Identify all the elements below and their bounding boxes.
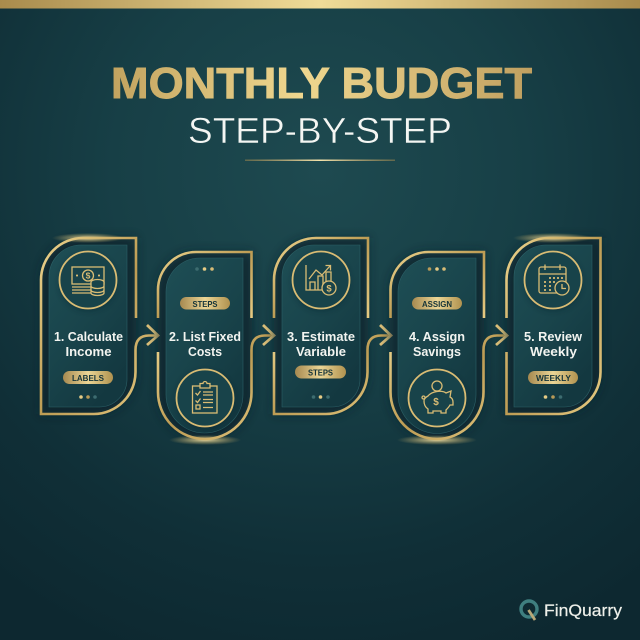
pill: weekly <box>528 371 578 384</box>
step 3 label: 3. Estimate <box>287 329 355 344</box>
panel: step 5 <box>506 233 601 414</box>
icon: banknote and coins: $ <box>86 270 91 280</box>
icon: bar chart with dollar <box>292 252 350 310</box>
page dots <box>195 267 214 271</box>
title divider <box>245 160 395 161</box>
step 5 label <box>524 329 583 359</box>
arrow: step 4 to step 5 <box>496 325 507 345</box>
arrow: step 1 to step 2 <box>147 325 158 345</box>
step 2 label: 2. List Fixed <box>169 329 241 344</box>
pill: labels <box>63 371 113 384</box>
pill: assign: ASSIGN <box>422 299 452 309</box>
step 3 label <box>287 329 355 359</box>
step 3 label: Variable <box>296 344 346 359</box>
panel: step 4 <box>390 252 507 445</box>
top gold bar <box>0 0 640 8</box>
arrow: step 2 to step 3 <box>263 325 274 345</box>
pill: steps: STEPS <box>192 299 218 309</box>
icon: calendar with clock <box>524 252 582 310</box>
logo: FinQuarry: FinQuarry <box>544 601 623 620</box>
panel: step 1 <box>41 233 158 414</box>
title <box>111 59 532 151</box>
step 1 label <box>54 329 123 359</box>
icon: clipboard checklist <box>176 370 234 428</box>
pill: weekly: WEEKLY <box>536 373 571 383</box>
pill: steps <box>180 297 230 310</box>
step 5 label: 5. Review <box>524 329 583 344</box>
icon: bar chart with dollar: $ <box>326 284 332 294</box>
icon: banknote and coins <box>60 252 116 310</box>
page dots <box>428 267 446 271</box>
arrow: step 3 to step 4 <box>380 325 391 345</box>
step 2 label: Costs <box>188 344 222 359</box>
step 4 label <box>409 329 465 359</box>
step 4 label: Savings <box>413 344 461 359</box>
step 5 label: Weekly <box>530 344 578 359</box>
step 4 label: 4. Assign <box>409 329 465 344</box>
page dots <box>544 395 562 399</box>
pill: labels: LABELS <box>72 373 104 383</box>
icon: piggy bank <box>408 370 466 428</box>
pill: assign <box>412 297 462 310</box>
pill: steps <box>295 366 346 378</box>
title: MONTHLY BUDGET <box>111 59 532 108</box>
page dots <box>79 395 97 399</box>
panel: step 3 <box>274 238 391 414</box>
page dots <box>312 395 330 399</box>
pill: steps: STEPS <box>308 368 333 378</box>
panel: step 2 <box>158 252 274 445</box>
step 2 label <box>169 329 241 359</box>
title: STEP-BY-STEP <box>188 110 452 151</box>
icon: piggy bank: $ <box>433 397 439 408</box>
step 1 label: Income <box>66 344 112 359</box>
step 1 label: 1. Calculate <box>54 329 123 344</box>
